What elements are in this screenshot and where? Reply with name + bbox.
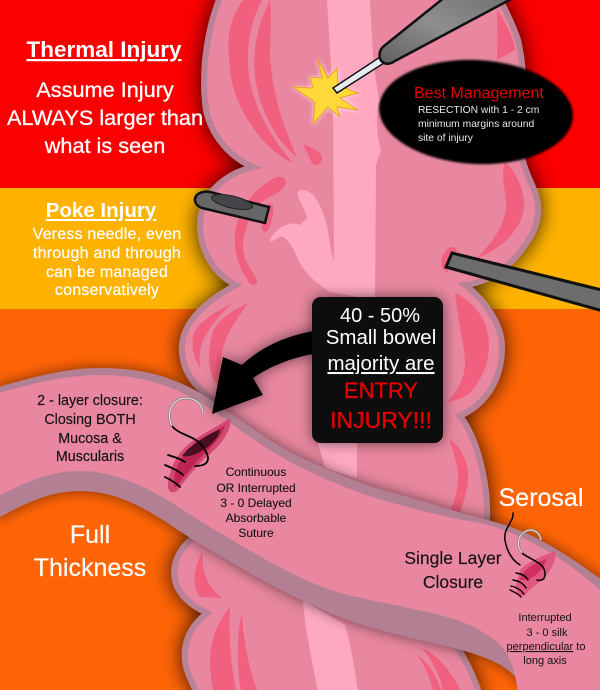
callout: small bowel entry injury: 40 - 50% (340, 305, 420, 327)
text: single layer closure: Closure (423, 572, 483, 592)
outer wall (0, 368, 600, 690)
crossing small bowel segment (0, 368, 600, 690)
callout: best management: minimum margins around (418, 119, 534, 130)
text: poke injury description (33, 226, 181, 299)
text: two layer closure (37, 393, 143, 465)
text: single layer closure (404, 548, 502, 592)
callout: best management: site of injury (418, 133, 474, 144)
text: suture details: OR Interrupted (216, 481, 296, 495)
title: serosal: Serosal (499, 484, 583, 512)
suture needle (169, 398, 203, 426)
text: two layer closure: Mucosa & (58, 431, 122, 447)
callout: small bowel entry injury (312, 297, 443, 443)
instrument entry mark (441, 247, 457, 273)
text: two layer closure: Muscularis (56, 449, 124, 465)
poke injury veress needle (195, 191, 269, 223)
closure stitches (510, 573, 528, 597)
text: thermal injury description: Assume Injury (36, 77, 174, 102)
fold stripes lower left bulge inner (209, 303, 248, 390)
fold stripes middle left (235, 177, 286, 285)
suture thread (505, 513, 545, 580)
callout: small bowel entry injury: INJURY!!! (330, 407, 432, 433)
fold stripes lower right bulge (450, 440, 468, 512)
text: two layer closure: Closing BOTH (44, 412, 136, 428)
text: suture details: Continuous (226, 465, 286, 479)
title: thermal injury: Thermal Injury (26, 37, 182, 62)
icon: thermal spark (293, 60, 358, 124)
fold stripes bottom right (417, 655, 441, 690)
highlight stripe (270, 0, 381, 300)
needle window (210, 191, 254, 213)
text: single layer closure: Single Layer (404, 548, 502, 568)
icon: serosal wound with suture (505, 513, 556, 597)
suture needle outline (518, 530, 541, 553)
fold stripes bottom left (194, 550, 223, 598)
fold spot (303, 144, 322, 165)
text: suture details: 3 - 0 Delayed (220, 496, 292, 510)
text: suture details: Absorbable (226, 511, 287, 525)
fold stripes right (477, 162, 524, 258)
text: thermal injury description (7, 77, 203, 158)
handle (380, 0, 515, 64)
text: poke injury description: can be managed (46, 264, 168, 281)
background: orange band (0, 309, 600, 690)
fold stripes bottom left lower outer (238, 612, 257, 690)
highlight stripe lower (303, 600, 358, 690)
title: poke injury: Poke Injury (46, 199, 157, 222)
title: full thickness: Full (70, 521, 110, 549)
vertical small bowel (174, 0, 538, 690)
fold stripes upper right bulge (447, 293, 489, 402)
fold stripes lower left bulge (192, 303, 233, 368)
electrode rod (333, 57, 384, 93)
text: thermal injury description: ALWAYS larger than (7, 105, 203, 130)
title: full thickness: Thickness (34, 554, 146, 582)
callout: small bowel entry injury: Small bowel (326, 326, 436, 349)
fold stripes top left inner (254, 0, 297, 157)
callout: best management (376, 55, 576, 169)
text: serosal suture details: perpendicular to (507, 641, 585, 653)
text: suture details (216, 465, 296, 540)
thermal injury instrument (333, 0, 515, 93)
suture needle (518, 530, 541, 553)
text: poke injury description: through and through (33, 245, 181, 262)
text: thermal injury description: what is seen (44, 133, 165, 158)
text: serosal suture details: long axis (523, 655, 567, 667)
suture thread (172, 426, 208, 466)
callout: small bowel entry injury: ENTRY (344, 378, 418, 403)
callout: small bowel entry injury: majority are (327, 352, 435, 375)
text: suture details: Suture (238, 526, 274, 540)
closure stitches (165, 455, 185, 487)
text: serosal suture details: 3 - 0 silk (527, 627, 568, 639)
inner lumen (0, 375, 600, 690)
laparoscopic port instrument (446, 253, 600, 313)
text: serosal suture details: Interrupted (518, 612, 572, 624)
text: poke injury description: conservatively (55, 282, 159, 299)
fold stripes bottom left lower (210, 607, 236, 690)
highlight stripe below callout (317, 440, 357, 478)
background: yellow band (0, 188, 600, 309)
text: poke injury description: Veress needle, even (33, 226, 181, 243)
fold stripes bottom right outer (422, 648, 460, 690)
title: full thickness (34, 521, 146, 582)
needle entry mark (262, 203, 273, 232)
fold stripes top right (497, 10, 515, 60)
background: red band (0, 0, 600, 188)
icon: full thickness wound with suture (165, 398, 230, 492)
text: two layer closure: 2 - layer closure: (37, 393, 143, 409)
fold stripes top left (228, 0, 293, 163)
arrow: to small bowel (212, 330, 320, 414)
text: serosal suture details (507, 612, 585, 667)
callout: best management: RESECTION with 1 - 2 cm (418, 105, 539, 116)
suture needle outline (169, 398, 203, 426)
callout: best management: Best Management (414, 85, 544, 102)
